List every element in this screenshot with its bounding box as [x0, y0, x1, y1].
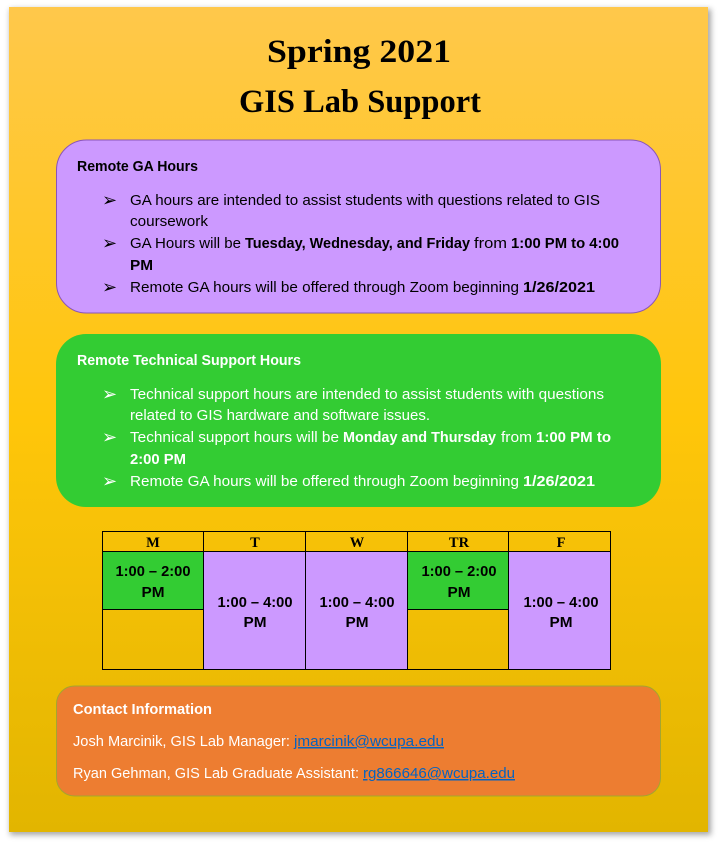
bullet list: GA hours: ➢ [102, 277, 117, 298]
bullet list: GA hours: GA Hours will be [130, 235, 241, 252]
bullet list: GA hours: 1/26/2021 [523, 279, 595, 296]
bullet list: technical support: related to GIS hardware and software issues. [130, 407, 430, 424]
table cell times: PM [244, 614, 266, 631]
bullet list: technical support: ➢ [102, 427, 117, 448]
bullet list: GA hours: ➢ [102, 190, 117, 211]
bullet list: GA hours: 1:00 PM to 4:00 [511, 235, 619, 252]
table header days: T [250, 535, 260, 551]
table cell times [116, 563, 598, 631]
panel: Contact Information [56, 686, 660, 796]
bullet list: GA hours: GA hours are intended to assist students with questions related to GIS [130, 192, 600, 209]
bullet list: GA hours: Tuesday, Wednesday, and Friday [245, 235, 471, 252]
contact: Ryan Gehman: rg866646@wcupa.edu [363, 765, 515, 782]
table cell times: 1:00 – 2:00 [422, 563, 496, 580]
green cells: Monday and Thursday [102, 552, 508, 610]
bullet list: technical support: from [501, 429, 532, 446]
contact: Josh Marcinik: Josh Marcinik, GIS Lab Manager: [73, 733, 290, 750]
bullet list: GA hours: PM [130, 257, 153, 274]
table cell times: PM [142, 584, 164, 601]
table cell times: 1:00 – 4:00 [524, 594, 598, 611]
contact: Ryan Gehman: Ryan Gehman, GIS Lab Graduate Assistant: [73, 765, 359, 782]
bullet list: GA hours: ➢ [102, 233, 117, 254]
table header days: F [557, 535, 566, 551]
table header days [146, 535, 566, 551]
heading: Remote Technical Support Hours: Remote Technical Support Hours [77, 352, 301, 369]
table cell times: PM [550, 614, 572, 631]
heading: Contact Information: Contact Information [73, 701, 212, 718]
table cell times: PM [346, 614, 368, 631]
table cell times: 1:00 – 4:00 [320, 594, 394, 611]
contact: Josh Marcinik [73, 733, 444, 750]
bullet list: technical support: ➢ [102, 384, 117, 405]
bullet list: technical support: 1:00 PM to [536, 429, 611, 446]
table cell times: 1:00 – 2:00 [116, 563, 190, 580]
contact: Josh Marcinik: jmarcinik@wcupa.edu [293, 733, 444, 750]
table header days: TR [449, 535, 470, 551]
schedule table [102, 532, 610, 670]
bullet list: technical support: Technical support hours are intended to assist students with questions [130, 386, 604, 403]
bullet list: GA hours [102, 190, 619, 298]
bullet list: technical support [102, 384, 611, 492]
bullet list: GA hours: from [474, 235, 507, 252]
bullet list: technical support: Monday and Thursday [343, 429, 497, 446]
title [239, 34, 481, 120]
bullet list: technical support: Technical support hours will be [130, 429, 339, 446]
bullet list: GA hours: coursework [130, 213, 208, 230]
table cell times: PM [448, 584, 470, 601]
bullet list: technical support: ➢ [102, 471, 117, 492]
panel: Remote Technical Support Hours [56, 334, 661, 507]
table cell times: 1:00 – 4:00 [218, 594, 292, 611]
title: GIS Lab Support [239, 84, 481, 120]
bullet list: GA hours: Remote GA hours will be offered through Zoom beginning [130, 279, 519, 296]
bullet list: technical support: Remote GA hours will be offered through Zoom beginning [130, 473, 519, 490]
purple cells: Tuesday, Wednesday, Friday [204, 552, 610, 670]
panel: Remote GA Hours [56, 140, 660, 313]
bullet list: technical support: 1/26/2021 [523, 473, 595, 490]
table header days: M [146, 535, 160, 551]
contact: Ryan Gehman [73, 765, 515, 782]
title: Spring 2021 [267, 34, 451, 70]
heading: Remote GA Hours: Remote GA Hours [77, 158, 198, 175]
table header days: W [350, 535, 365, 551]
bullet list: technical support: 2:00 PM [130, 451, 186, 468]
